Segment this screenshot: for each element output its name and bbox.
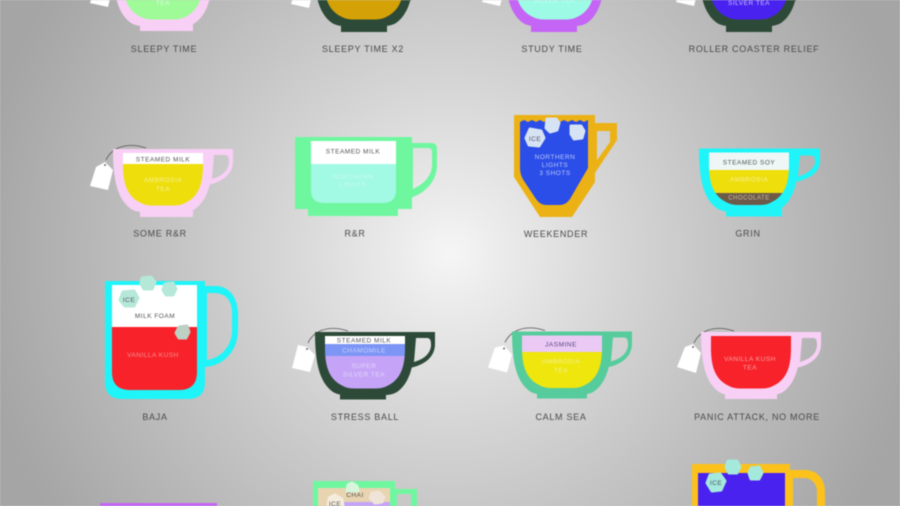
label: r&r: R&R xyxy=(344,228,366,238)
text: ice: ICE xyxy=(123,297,135,304)
label: roller coaster relief: ROLLER COASTER RELIEF xyxy=(689,44,819,54)
text: northern lights 3 shots: 3 SHOTS xyxy=(539,170,571,177)
text: ambrosia: AMBROSIA xyxy=(730,176,768,184)
text: northern lights 3 shots: LIGHTS xyxy=(542,162,568,169)
label: some r&r: SOME R&R xyxy=(133,228,187,238)
ice cubes xyxy=(707,461,762,491)
cup: r&r xyxy=(295,137,437,216)
cup: stress ball xyxy=(292,328,435,400)
text: chocolate: CHOCOLATE xyxy=(728,196,770,202)
text: northern lights 3 shots: NORTHERN xyxy=(535,154,575,161)
label: grin: GRIN xyxy=(735,228,761,238)
label: baja: BAJA xyxy=(142,412,168,422)
text: tea: TEA xyxy=(156,0,170,7)
cup: baja xyxy=(105,277,238,399)
cup: chai xyxy=(313,481,417,506)
ice cubes xyxy=(120,277,189,338)
text: steamed milk: STEAMED MILK xyxy=(136,156,190,164)
label: calm sea: CALM SEA xyxy=(535,412,587,422)
text: northern lights: LIGHTS xyxy=(340,182,366,188)
ice cubes xyxy=(526,119,584,146)
text: vanilla kush tea: VANILLA KUSH xyxy=(724,356,776,363)
label: stress ball: STRESS BALL xyxy=(331,412,399,422)
text: steamed soy: STEAMED SOY xyxy=(723,160,775,166)
cup: study time xyxy=(482,0,603,33)
cup: sleepy time x2 xyxy=(290,0,412,33)
text: ice: ICE xyxy=(710,480,722,487)
cup: panic attack, no more xyxy=(677,328,821,399)
cup: grin xyxy=(699,148,820,216)
cup: weekender xyxy=(514,115,617,217)
cup: some r&r xyxy=(90,145,233,217)
text: ambrosia tea: AMBROSIA xyxy=(144,177,182,184)
label: sleepy time x2: SLEEPY TIME X2 xyxy=(322,44,404,54)
label: sleepy time: SLEEPY TIME xyxy=(131,44,197,54)
text: steamed milk: STEAMED MILK xyxy=(326,148,380,156)
label: study time: STUDY TIME xyxy=(521,44,583,54)
text: ice: ICE xyxy=(529,136,541,143)
text: vanilla kush: VANILLA KUSH xyxy=(127,352,179,359)
text: milk foam: MILK FOAM xyxy=(135,313,175,320)
text: super silver tea: SUPER xyxy=(352,363,376,370)
text: steamed milk: STEAMED MILK xyxy=(337,338,391,344)
cup: calm sea xyxy=(488,328,632,398)
text: ambrosia tea: AMBROSIA xyxy=(542,358,580,366)
label: weekender: WEEKENDER xyxy=(524,229,588,239)
cup: bottom right partial xyxy=(692,461,825,506)
text: jasmine: JASMINE xyxy=(545,342,577,348)
text: vanilla kush tea: TEA xyxy=(743,364,757,372)
text: chamomile: CHAMOMILE xyxy=(342,348,386,354)
cup: bottom left partial xyxy=(100,503,217,506)
text: chai: CHAI xyxy=(346,492,364,499)
text: northern lights: NORTHERN xyxy=(333,174,373,181)
cup: sleepy time xyxy=(90,0,210,32)
text: ambrosia tea: TEA xyxy=(554,368,568,374)
text: super silver tea: SILVER TEA xyxy=(343,372,385,378)
cup: roller coaster relief xyxy=(676,0,797,33)
label: panic attack, no more: PANIC ATTACK, NO MORE xyxy=(694,412,820,422)
text: ambrosia tea: TEA xyxy=(156,186,170,193)
ice cubes xyxy=(328,483,384,506)
text: silver tea: SILVER TEA xyxy=(728,0,770,7)
